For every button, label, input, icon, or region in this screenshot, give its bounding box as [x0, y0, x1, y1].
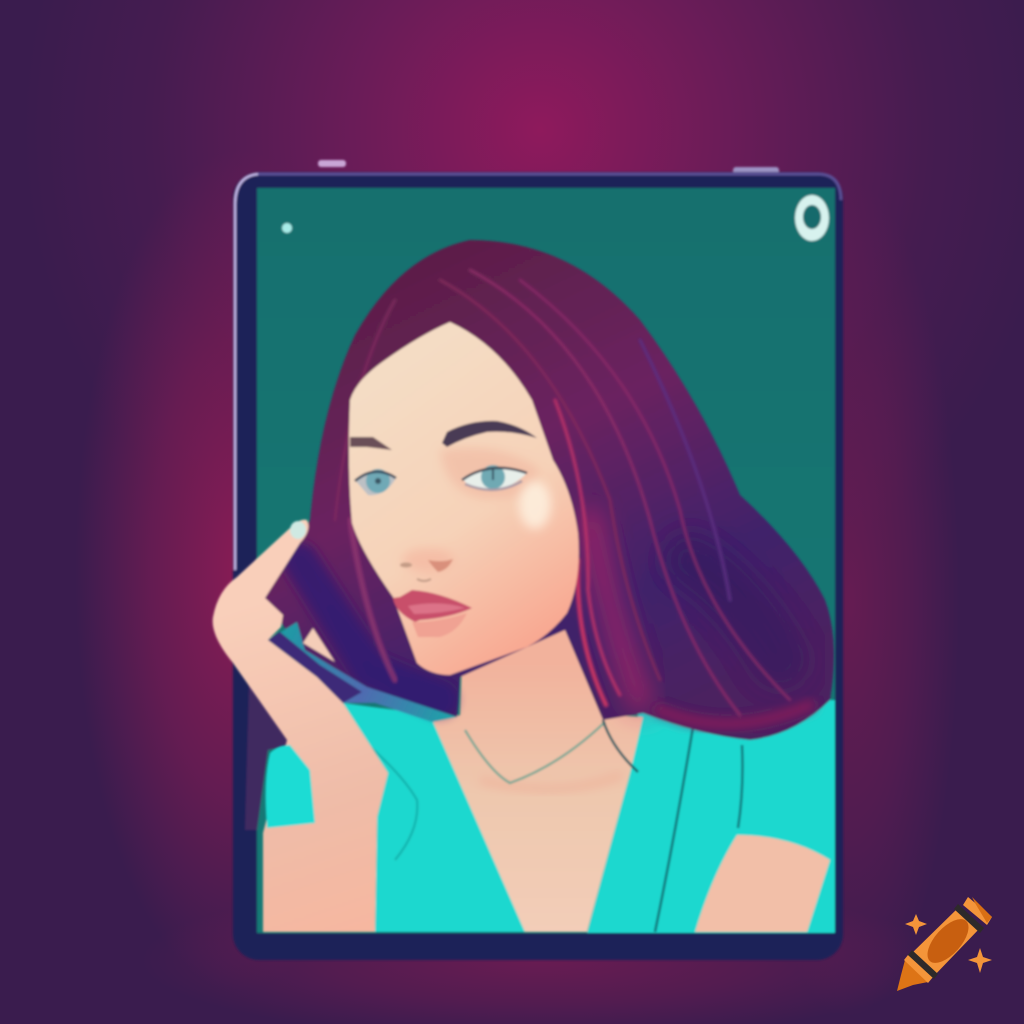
left eye [355, 469, 396, 495]
collar shadow [480, 775, 622, 789]
shirt sleeve [266, 745, 315, 828]
tablet [233, 160, 843, 960]
right eye [462, 465, 527, 490]
hair shading [300, 520, 810, 724]
necklace [465, 722, 605, 783]
eye socket shadow [440, 448, 540, 499]
tablet buttons [318, 160, 779, 174]
hair [265, 240, 834, 740]
tablet screen [257, 188, 835, 933]
camera dot [282, 223, 292, 233]
right arm [695, 835, 830, 932]
cheek highlight [519, 481, 551, 529]
lock of hair [268, 622, 457, 722]
woman [213, 240, 835, 933]
sparkles [905, 914, 927, 935]
crayon [897, 897, 992, 991]
shirt [343, 700, 835, 933]
lips [393, 590, 472, 637]
right eyebrow [442, 421, 537, 447]
tablet frame [233, 172, 843, 960]
face [349, 322, 579, 675]
skin sliver behind lock [303, 628, 335, 662]
chest and neck [433, 620, 643, 932]
nose [400, 548, 454, 581]
hair strands [335, 270, 790, 715]
logo: crayon with sparkles [897, 897, 992, 991]
hand and arm [213, 520, 388, 932]
camera lens [795, 195, 829, 241]
left eyebrow [350, 437, 392, 450]
